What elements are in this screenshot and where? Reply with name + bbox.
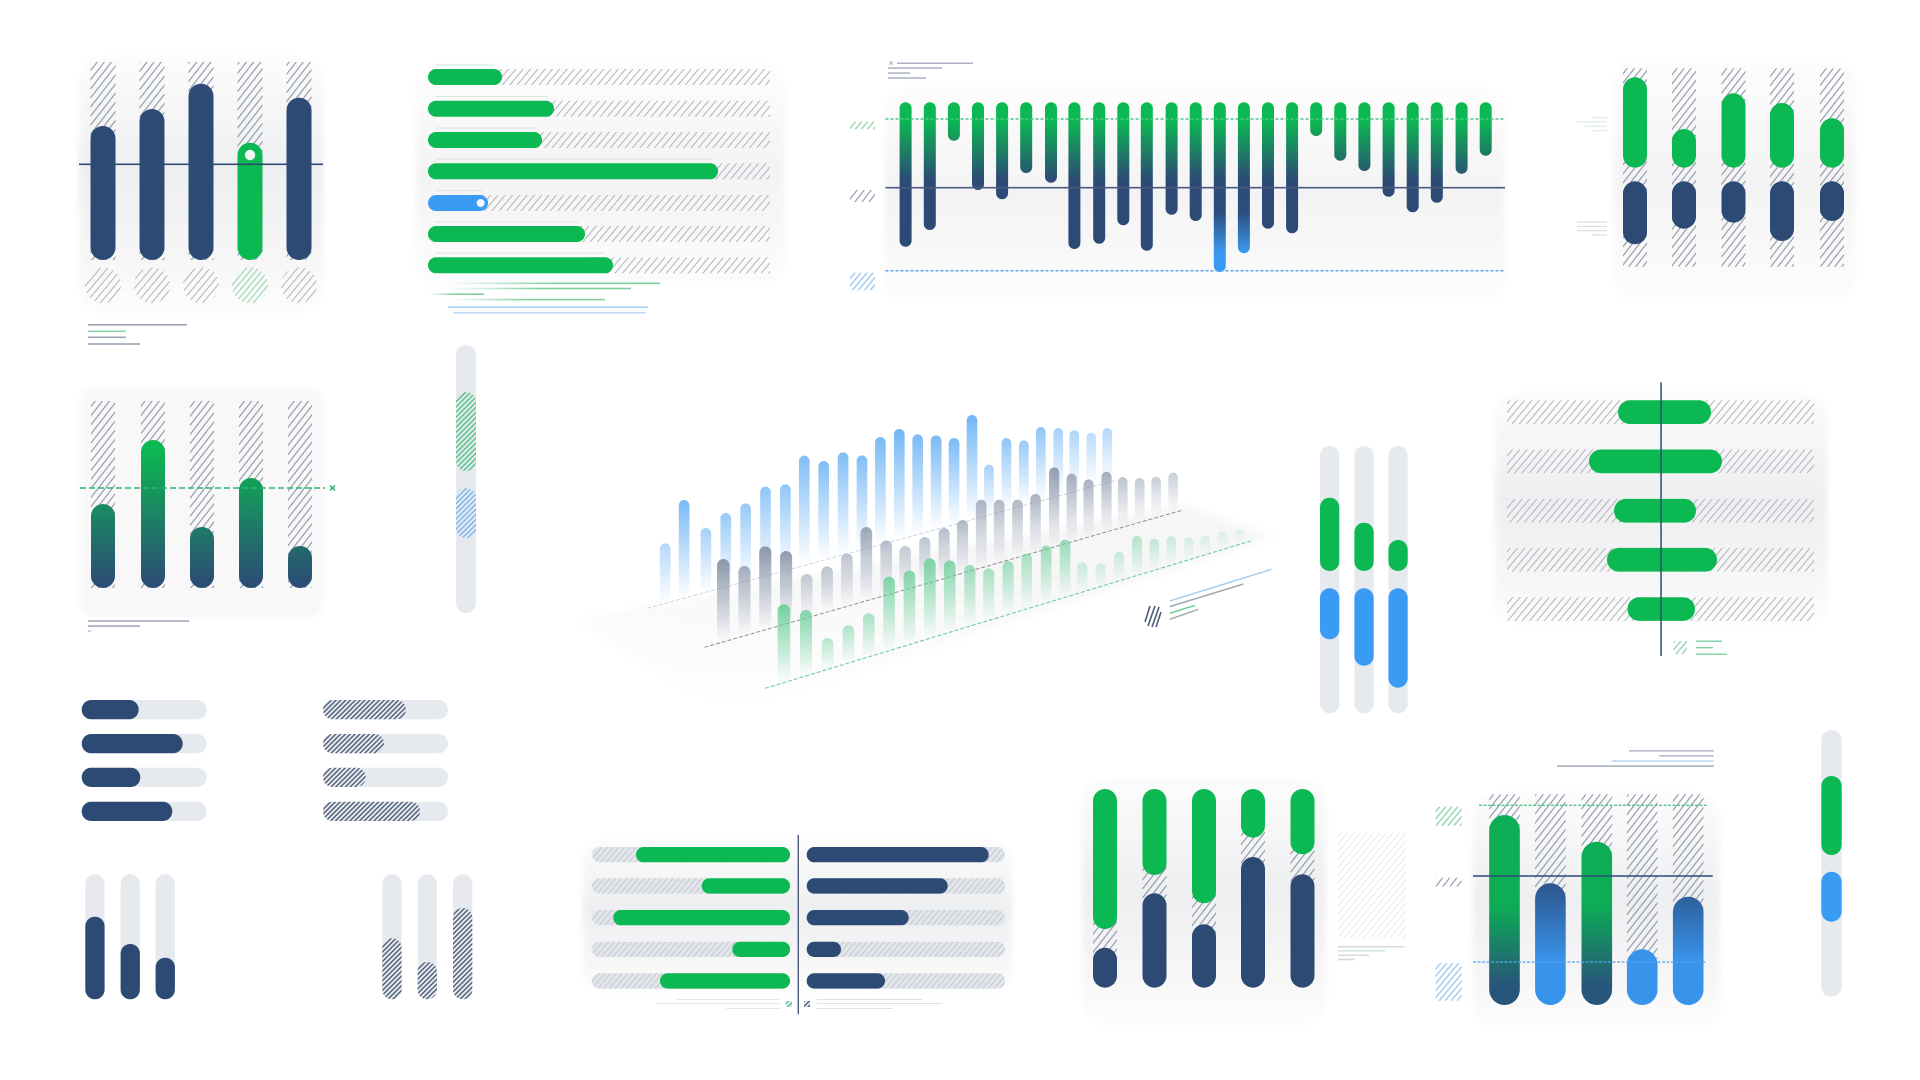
navy and green columns [90, 84, 312, 260]
hatched circles under columns [85, 267, 317, 303]
caption with x mark [888, 58, 973, 79]
single track with hatched ranges [456, 345, 476, 613]
legend swatches [1436, 807, 1462, 1001]
chart: isometric three-series bar chart [579, 415, 1273, 717]
floor plane [579, 505, 1273, 717]
gradient bars [91, 440, 312, 588]
caption lines [88, 620, 189, 632]
green upper bars [1623, 77, 1844, 168]
green segments [1320, 498, 1408, 571]
panel: stacked green and navy columns [1082, 778, 1326, 1025]
green series [778, 529, 1244, 683]
caption lines [428, 282, 660, 314]
panel: centred range bars [1495, 382, 1828, 656]
columns [1489, 815, 1704, 1005]
bar values [428, 69, 718, 273]
triple tracks: green and blue [1320, 446, 1408, 713]
legends [656, 999, 943, 1009]
navy bars [1093, 857, 1314, 988]
navy vertical progress bars [85, 874, 175, 999]
green left bars [613, 847, 790, 989]
blue series [660, 415, 1112, 603]
caption lines [1557, 750, 1714, 767]
hanging bars [900, 102, 1492, 272]
panel: green and navy paired columns [1577, 57, 1855, 303]
legend lines [1170, 569, 1272, 619]
green bars [1093, 789, 1314, 929]
faint hatched legend panel [1338, 833, 1406, 960]
legend swatches [850, 122, 875, 290]
blue segments [1320, 588, 1408, 688]
grey series [717, 467, 1178, 642]
panel: butterfly bar chart [583, 835, 1012, 1014]
navy lower bars [1623, 181, 1844, 244]
panel: navy columns with one green highlight [79, 57, 323, 345]
caption lines [88, 324, 187, 345]
hatched vertical progress bars [382, 874, 472, 999]
navy progress bars [82, 700, 207, 821]
panel: horizontal green bars [416, 63, 785, 314]
navy right bars [807, 847, 989, 989]
single track: green and blue segments [1821, 730, 1842, 997]
legend swatch [1145, 606, 1161, 627]
panel: hanging thin bars chart [850, 58, 1505, 303]
side caption lines [1577, 117, 1607, 236]
caption with x mark: × [888, 58, 894, 68]
panel: gradient columns with three thresholds [1436, 750, 1720, 1028]
green ranges [1589, 400, 1722, 621]
legend [1674, 640, 1727, 655]
panel: gradient columns with dashed target [80, 388, 336, 632]
hatched progress bars [323, 700, 448, 821]
x mark: × [329, 481, 336, 495]
